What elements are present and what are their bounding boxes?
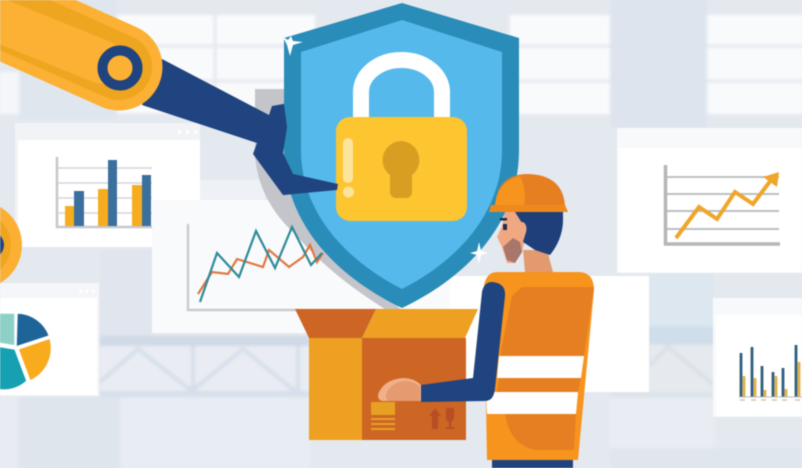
lock body bbox=[336, 117, 467, 221]
pie chart bbox=[0, 313, 51, 390]
reflective stripes bbox=[486, 356, 584, 414]
shield bbox=[284, 3, 519, 308]
padlock bbox=[336, 60, 467, 221]
panel: bar chart window bbox=[15, 123, 200, 247]
beard bbox=[503, 238, 522, 263]
claw tip over shield bbox=[272, 104, 338, 195]
panel: small bar chart window bbox=[713, 298, 802, 417]
shield shadow bbox=[255, 89, 400, 309]
hand bbox=[378, 378, 421, 401]
trousers bbox=[492, 458, 573, 468]
vest bbox=[484, 272, 594, 460]
sleeve bbox=[421, 282, 505, 402]
highlights bbox=[343, 138, 353, 183]
face bbox=[497, 212, 526, 263]
keyhole bbox=[383, 141, 419, 198]
cardboard box bbox=[295, 309, 478, 440]
sparkle bbox=[283, 36, 303, 56]
helmet bbox=[489, 174, 568, 212]
ear bbox=[518, 222, 526, 236]
sparkle bbox=[470, 242, 488, 264]
panel: line chart window bbox=[152, 180, 452, 333]
robot arm: forearm bbox=[142, 59, 338, 195]
second robot arm fragment bbox=[0, 201, 22, 289]
neck bbox=[523, 250, 553, 272]
worker bbox=[378, 174, 594, 468]
panel: window behind worker bbox=[450, 276, 649, 392]
panel: pie chart window bbox=[0, 283, 99, 396]
hair bbox=[515, 212, 563, 255]
robot arm: upper segment bbox=[0, 0, 138, 86]
shackle bbox=[361, 60, 442, 120]
box label bbox=[371, 402, 395, 429]
panel: trend chart window bbox=[617, 128, 802, 273]
joint ring bbox=[102, 50, 138, 86]
vest shaded back bbox=[497, 287, 594, 450]
eyebrow and eye bbox=[500, 218, 507, 230]
handling icons bbox=[429, 408, 454, 429]
line chart series bbox=[198, 227, 323, 302]
